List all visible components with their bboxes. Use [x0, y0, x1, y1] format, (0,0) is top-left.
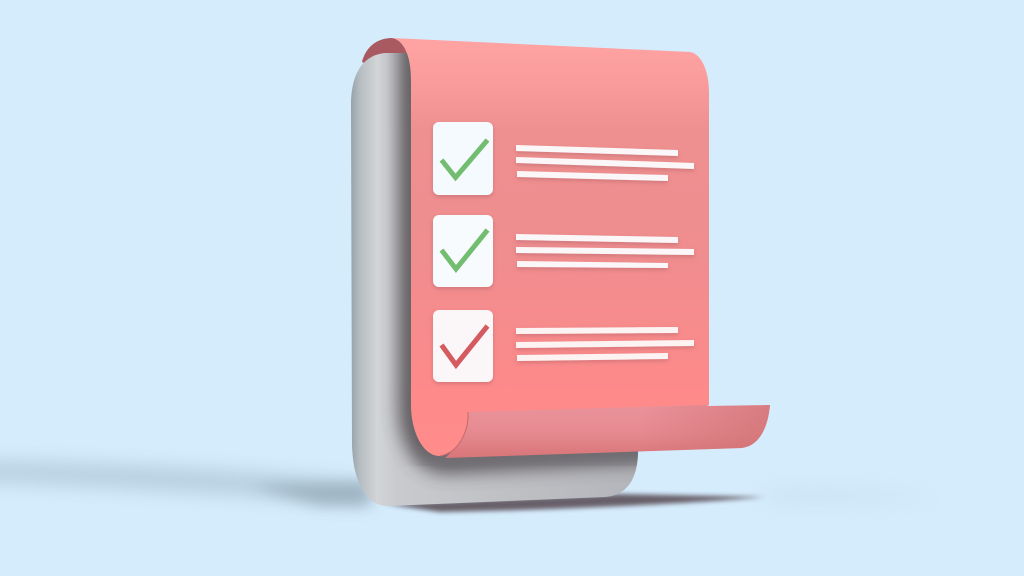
text lines 3 [516, 327, 694, 361]
clipboard board [351, 53, 638, 506]
checkbox row 2 [433, 215, 694, 287]
ground shadows [0, 462, 940, 512]
text lines 2 [516, 234, 694, 268]
back sheet fold [362, 38, 411, 100]
checkbox row 1 [433, 122, 694, 195]
checkbox 2 [433, 215, 493, 287]
main sheet [392, 38, 709, 456]
curled flap [445, 402, 770, 458]
checkbox row 3 [433, 310, 694, 382]
illustration: 3D checklist document [0, 38, 770, 516]
checkbox 3 [433, 310, 493, 382]
text lines 1 [516, 145, 694, 181]
checkbox 1 [433, 122, 493, 195]
